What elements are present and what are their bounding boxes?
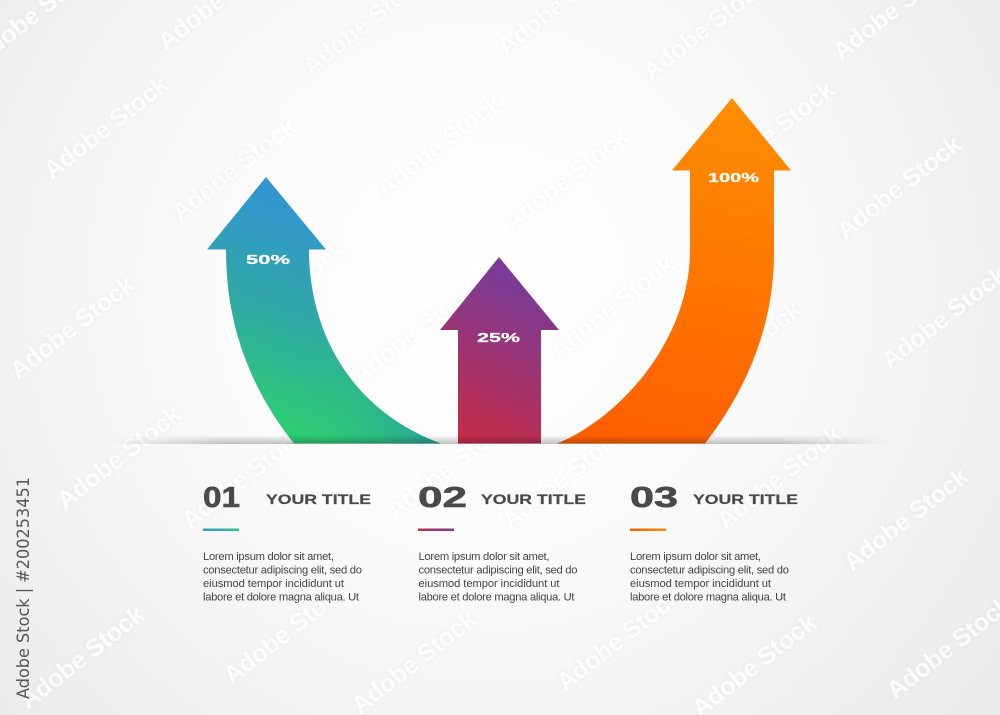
shadow line above panel (127, 436, 874, 444)
body text 02: labore et dolore magna aliqua. Ut (418, 592, 575, 604)
title 02: YOUR TITLE (481, 491, 586, 507)
label 25%: 25% (477, 330, 521, 345)
body text 01: Lorem ipsum dolor sit amet, (203, 551, 334, 563)
number 03: 03 (630, 482, 678, 514)
body text 02: consectetur adipiscing elit, sed do (418, 564, 578, 576)
number 02: 02 (418, 482, 467, 514)
title 01: YOUR TITLE (266, 491, 371, 507)
arrow 2: 25% (440, 257, 559, 444)
text: Adobe Stock (381, 410, 517, 525)
arrow 3: 100% (557, 98, 791, 444)
text: Adobe Stock (711, 420, 847, 535)
text: Adobe Stock (216, 235, 352, 350)
body text 02: Lorem ipsum dolor sit amet, (418, 551, 550, 563)
label 50%: 50% (246, 252, 291, 267)
text: Adobe Stock (218, 575, 354, 690)
text: Adobe Stock (544, 250, 680, 365)
text: Adobe Stock (671, 295, 807, 410)
body text 01: consectetur adipiscing elit, sed do (203, 564, 362, 576)
body text 03: Lorem ipsum dolor sit amet, (630, 551, 761, 563)
column 03 (630, 482, 798, 604)
body text 01 (203, 551, 362, 604)
body text 03 (630, 551, 789, 604)
text: Adobe Stock (166, 112, 302, 227)
body text 03: labore et dolore magna aliqua. Ut (630, 592, 787, 604)
body text 03: eiusmod tempor incididunt ut (630, 578, 772, 590)
text: Adobe Stock (38, 70, 174, 185)
text: Adobe Stock (51, 400, 187, 515)
arrow 1: 50% (207, 177, 441, 444)
text: Adobe Stock (704, 75, 840, 190)
title 03: YOUR TITLE (693, 491, 798, 507)
text: Adobe Stock (4, 270, 140, 385)
label 100%: 100% (708, 170, 760, 185)
text: Adobe Stock (498, 122, 634, 237)
body text 01: labore et dolore magna aliqua. Ut (203, 592, 360, 604)
text: Adobe Stock (346, 275, 482, 390)
underline 01 (203, 528, 239, 531)
text: Adobe Stock (14, 600, 150, 715)
column 02 (418, 482, 586, 604)
text: Adobe Stock (838, 462, 974, 577)
text: Adobe Stock (371, 88, 507, 203)
underline 03 (630, 528, 666, 531)
text: Adobe Stock (496, 420, 632, 535)
body text 01: eiusmod tempor incididunt ut (203, 578, 345, 590)
side stock id: Adobe Stock | #200253451 (14, 477, 34, 699)
text: Adobe Stock (551, 582, 687, 697)
text: Adobe Stock (176, 420, 312, 535)
body text 02: eiusmod tempor incididunt ut (418, 578, 560, 590)
body text 03: consectetur adipiscing elit, sed do (630, 564, 789, 576)
underline 02 (418, 528, 454, 531)
number 01: 01 (203, 482, 240, 514)
column 01 (203, 482, 371, 604)
text: Adobe Stock (831, 130, 967, 245)
body text 02 (418, 551, 578, 604)
